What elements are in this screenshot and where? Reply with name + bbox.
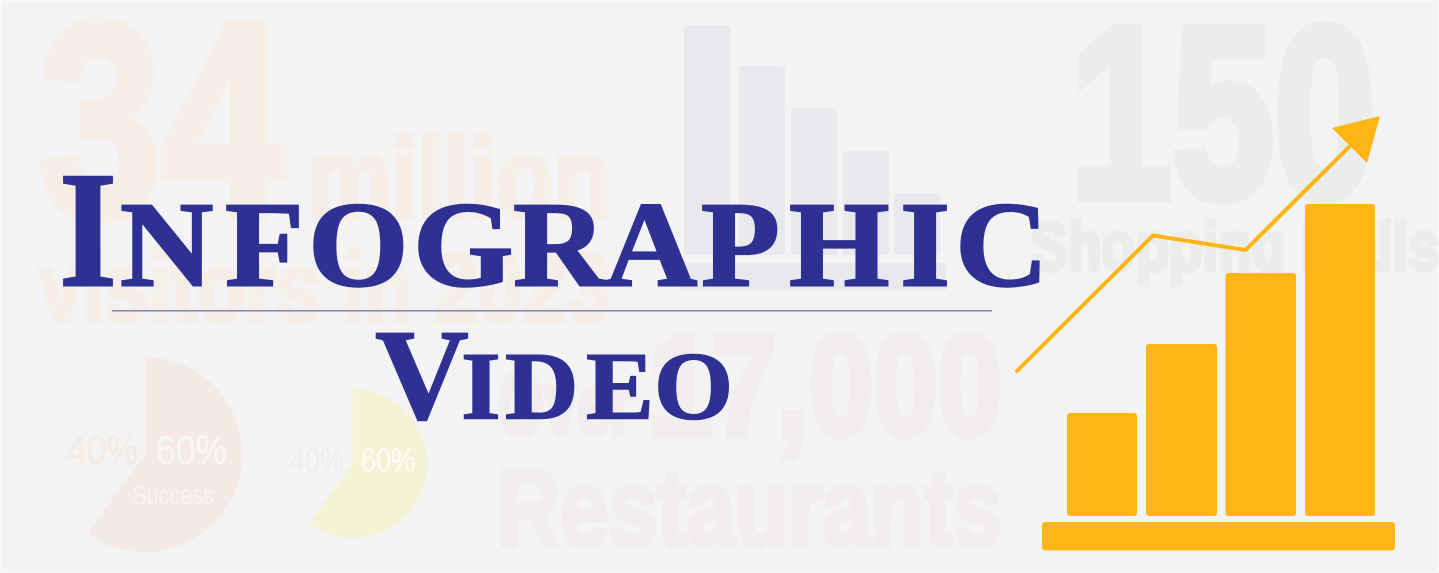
- number 17,000: 17,000: [648, 305, 1002, 466]
- label Success: Success: [132, 480, 214, 510]
- label 60% small: 60%: [361, 442, 415, 478]
- icon: orange rising bar chart: [1042, 204, 1395, 550]
- faded statistic: 34 million visitors in 2023: [39, 0, 611, 342]
- title: Infographic: NFOGRAPHIC: [120, 178, 1048, 313]
- faded pie chart: yellow: [278, 389, 427, 538]
- faded statistic: Over 17,000 Restaurants: [497, 305, 1002, 570]
- divider line: [112, 310, 992, 312]
- faded pie chart: success: [48, 357, 242, 552]
- faded bar chart: [679, 25, 946, 291]
- arrow: rising trend line: [1017, 116, 1380, 371]
- word Restaurants: Restaurants: [497, 447, 1002, 570]
- title: Infographic: [59, 138, 1048, 322]
- faded statistic: 150 Shopping Malls: [1031, 0, 1439, 285]
- subtitle: Video: V: [375, 304, 469, 448]
- subtitle: Video: [375, 304, 733, 448]
- title: Infographic: I: [59, 138, 117, 322]
- bar 4: [1305, 204, 1375, 516]
- words visitors in 2023: visitors in 2023: [39, 232, 610, 342]
- word Over: Over: [498, 355, 633, 455]
- bar 2: [1146, 344, 1217, 516]
- chart base: [1042, 522, 1395, 550]
- label 40%: 40%: [67, 427, 138, 473]
- subtitle: Video: IDEO: [461, 334, 733, 440]
- label 40% small: 40%: [290, 442, 344, 478]
- bar 1: [1067, 413, 1137, 516]
- bar 3: [1226, 273, 1296, 516]
- word million: million: [307, 115, 611, 241]
- label 60%: 60%: [156, 427, 227, 473]
